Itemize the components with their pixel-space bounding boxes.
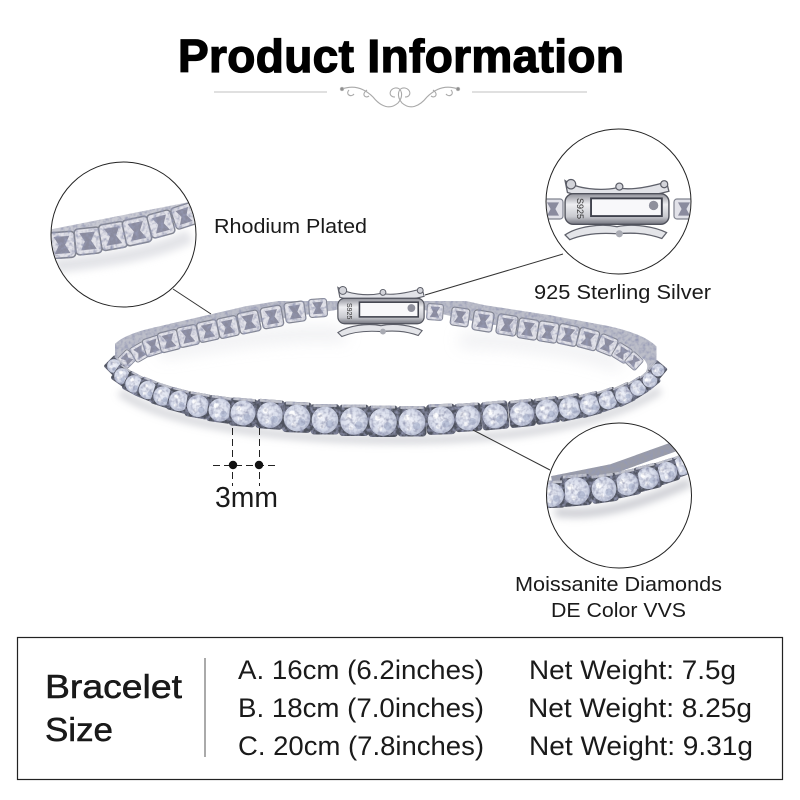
heading: bracelet size: Bracelet (45, 668, 182, 705)
3mm dimension marker (213, 428, 279, 514)
heading: bracelet size (45, 668, 182, 748)
clasp: S925 (345, 303, 352, 319)
label: moissanite diamonds: DE Color VVS (551, 600, 686, 622)
net weight list (528, 655, 753, 761)
label: moissanite diamonds (515, 574, 722, 622)
title: Product Information (178, 30, 624, 82)
detail circle: clasp (543, 129, 694, 274)
detail circle: clasp: S925 (575, 198, 585, 219)
leader lines (173, 254, 563, 470)
panel: bracelet size (18, 638, 782, 780)
label: rhodium plated: Rhodium Plated (214, 216, 367, 238)
size list: C. 20cm (7.8inches) (238, 731, 484, 761)
detail circle: moissanite stones (539, 423, 695, 568)
bracelet back rim (115, 301, 656, 376)
net weight list: Net Weight: 7.5g (529, 655, 736, 685)
heading: bracelet size: Size (45, 711, 113, 748)
divider (204, 658, 206, 757)
label: moissanite diamonds: Moissanite Diamonds (515, 574, 722, 596)
size list: B. 18cm (7.0inches) (238, 693, 484, 723)
net weight list: Net Weight: 9.31g (529, 731, 753, 761)
size list: A. 16cm (6.2inches) (238, 655, 484, 685)
net weight list: Net Weight: 8.25g (528, 693, 752, 723)
bracelet (103, 286, 668, 440)
detail circle: rhodium plated (48, 162, 198, 307)
clasp (338, 286, 424, 336)
size list (238, 655, 484, 761)
front row stones (103, 355, 668, 437)
back row links left (117, 298, 328, 369)
back row links right (426, 303, 644, 371)
ornament divider (214, 87, 587, 107)
bracelet shadow (120, 334, 660, 440)
label: sterling silver: 925 Sterling Silver (534, 282, 711, 304)
3mm dimension marker: 3mm (215, 482, 278, 514)
